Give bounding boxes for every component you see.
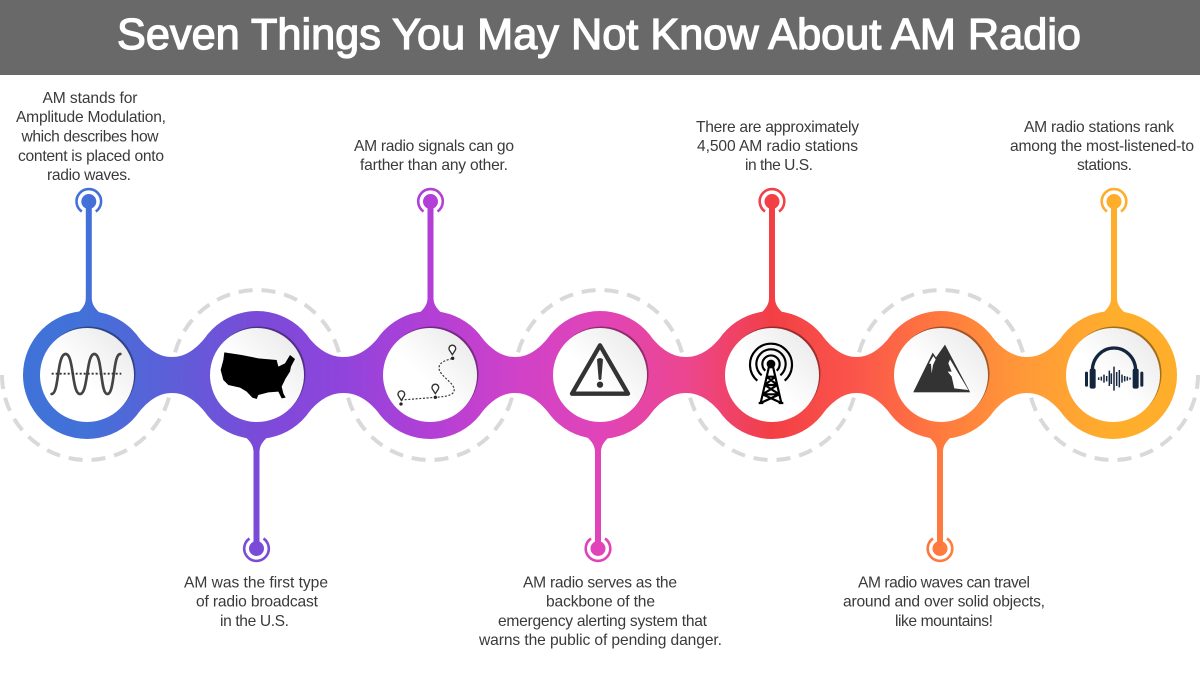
icon: headphones with sound wave (1085, 348, 1143, 391)
icon: radio tower (750, 344, 792, 403)
text: station count: There are approximately (696, 119, 859, 136)
text: emergency alerting: backbone of the (546, 594, 655, 610)
pin 6 (928, 538, 952, 561)
pin 7 (1102, 189, 1126, 212)
text: most listened: among the most-listened-to (1010, 138, 1194, 155)
stem: 7 (1103, 205, 1125, 320)
text: amplitude modulation: AM stands for (42, 90, 138, 107)
gradient timeline band with pin stems (23, 205, 1177, 545)
text: amplitude modulation: Amplitude Modulation, (16, 109, 166, 126)
pin 2 (244, 538, 269, 561)
text: most listened: stations. (1077, 157, 1132, 174)
icon: USA map (221, 352, 295, 399)
text: amplitude modulation: which describes how (20, 128, 159, 146)
dashed arcs behind timeline (2, 290, 1198, 460)
text: emergency alerting: emergency alerting system that (498, 613, 708, 630)
text: station count: in the U.S. (745, 157, 813, 174)
text: amplitude modulation: content is placed onto (18, 148, 164, 165)
text: solid objects (843, 574, 1045, 630)
title: Seven Things You May Not Know About AM Radio (117, 10, 1081, 59)
pin 5 (760, 189, 784, 212)
stem: 6 (929, 430, 951, 545)
inner white discs (40, 326, 1162, 422)
icon: dashed route with pins (398, 345, 456, 406)
text: most listened: AM radio stations rank (1024, 119, 1174, 136)
icon: sine wave (52, 354, 121, 394)
text: signals go farther: farther than any other. (360, 157, 508, 174)
text: emergency alerting (478, 574, 722, 649)
text: emergency alerting: AM radio serves as the (523, 574, 677, 592)
icon: warning triangle (572, 345, 628, 394)
stem: 2 (246, 430, 268, 545)
text: amplitude modulation (16, 90, 166, 184)
pin 1 (76, 189, 101, 212)
stem: 3 (420, 205, 442, 320)
text: first broadcast (184, 574, 328, 630)
text: most listened (1010, 119, 1194, 174)
title bar (0, 0, 1200, 75)
stem: 5 (761, 205, 783, 320)
pin 4 (586, 538, 610, 561)
text: solid objects: AM radio waves can travel (858, 574, 1030, 592)
pin markers (76, 189, 1126, 561)
text: station count (696, 119, 859, 174)
text: station count: 4,500 AM radio stations (697, 138, 858, 155)
text: first broadcast: in the U.S. (220, 613, 289, 630)
text: emergency alerting: warns the public of pending danger. (478, 632, 722, 649)
text: first broadcast: of radio broadcast (196, 594, 319, 610)
text: solid objects: like mountains! (895, 613, 993, 630)
pin 3 (418, 189, 443, 212)
text: solid objects: around and over solid objects, (843, 594, 1045, 610)
text: signals go farther: AM radio signals can go (354, 138, 514, 155)
icon: mountains (913, 345, 970, 392)
text: first broadcast: AM was the first type (184, 574, 328, 592)
stem: 1 (78, 205, 100, 320)
text: signals go farther (354, 138, 514, 174)
text: amplitude modulation: radio waves. (47, 167, 131, 184)
stem: 4 (587, 430, 609, 545)
